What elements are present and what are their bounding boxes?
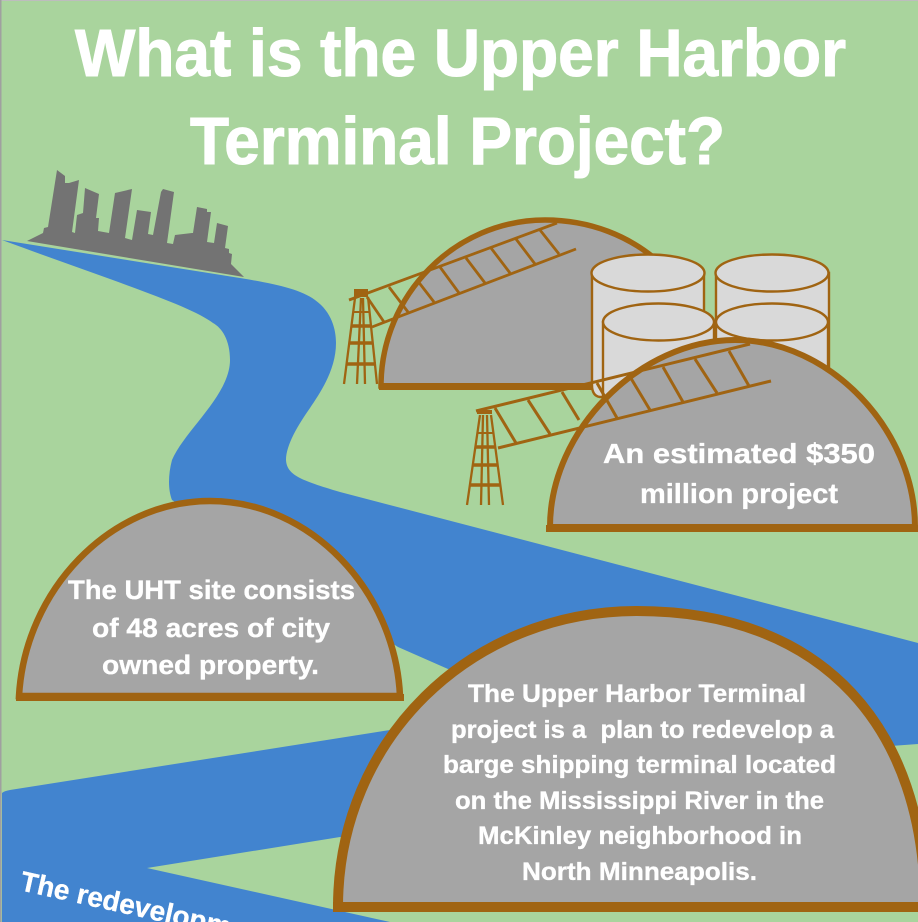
icon: storage tanks	[592, 254, 829, 400]
text: project description: on the Mississippi River in the	[455, 787, 824, 815]
text: site size: of 48 acres of city	[92, 613, 330, 643]
panel: project description dome	[333, 611, 918, 912]
title	[75, 16, 846, 179]
text: project cost	[603, 438, 875, 509]
text: site size: The UHT site consists	[68, 575, 355, 605]
text: project cost: million project	[640, 478, 838, 509]
text: site size: owned property.	[102, 650, 319, 680]
icon: conveyor and tower	[467, 344, 771, 505]
text: site size	[68, 575, 355, 680]
text: project description: barge shipping terminal located	[443, 751, 836, 779]
text: project description: The Upper Harbor Terminal	[468, 680, 806, 708]
panel: site size dome	[16, 501, 404, 701]
text: project cost: An estimated $350	[603, 438, 875, 469]
river	[2, 240, 918, 922]
text: project description	[443, 680, 836, 886]
icon: city skyline	[27, 170, 244, 277]
text: project description: project is a plan to redevelop a	[451, 716, 835, 744]
text: project description: McKinley neighborhood in	[478, 822, 802, 850]
icon: back terminal dome with conveyor and tower	[344, 220, 690, 390]
text: project description: North Minneapolis.	[522, 858, 757, 886]
title: Terminal Project?	[190, 104, 725, 179]
title: What is the Upper Harbor	[75, 16, 846, 91]
panel: project cost dome	[467, 340, 918, 532]
